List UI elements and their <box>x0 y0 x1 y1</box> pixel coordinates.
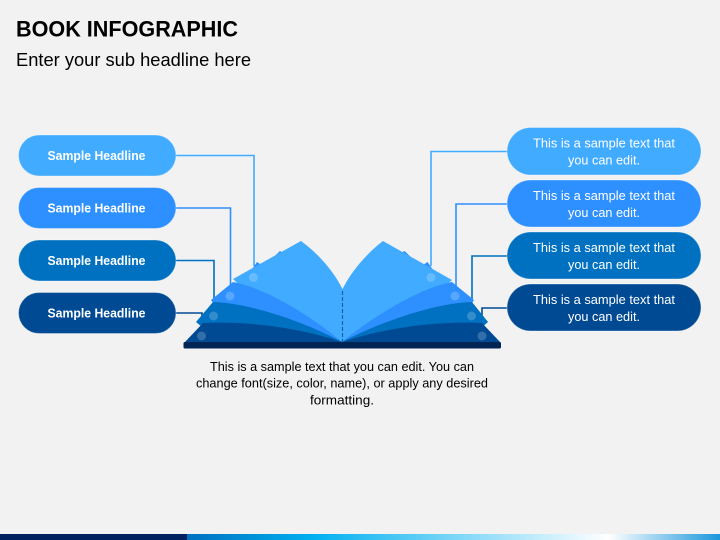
connectors: left <box>176 156 254 326</box>
left pill 1: Sample Headline <box>48 149 146 163</box>
left pill 4 <box>18 292 176 334</box>
connectors: right <box>431 152 507 326</box>
left pill 4: Sample Headline <box>48 306 146 320</box>
right pill 1 <box>507 128 701 175</box>
left pill 2 <box>18 188 176 228</box>
caption text: formatting. <box>310 392 374 407</box>
right pill 3 <box>507 232 701 279</box>
small page tips behind <box>250 251 285 272</box>
spine dashed line <box>342 291 344 342</box>
right pill 2 <box>507 180 701 227</box>
right pill 1: This is a sample text that <box>533 136 675 150</box>
right pages <box>342 241 452 342</box>
book base <box>184 342 501 348</box>
right pill 1: you can edit. <box>568 152 640 168</box>
caption text: This is a sample text that you can edit. You can <box>210 359 474 374</box>
open book illustration <box>184 241 501 348</box>
right pill 2: you can edit. <box>568 205 640 220</box>
right pill 3: This is a sample text that <box>533 240 675 255</box>
caption text: change font(size, color, name), or apply any desired <box>196 376 488 391</box>
sub headline: Enter your sub headline here <box>16 49 251 70</box>
left pill 1 <box>18 135 176 176</box>
right pill 4: This is a sample text that <box>533 292 675 307</box>
page marker dots <box>197 273 486 340</box>
title: BOOK INFOGRAPHIC <box>16 16 238 42</box>
caption text <box>196 359 488 407</box>
left pill 3: Sample Headline <box>48 254 146 268</box>
right pill 4 <box>507 284 701 331</box>
footer bar <box>0 534 720 540</box>
left pages <box>233 241 343 342</box>
right pill 2: This is a sample text that <box>533 188 675 203</box>
right pill 4: you can edit. <box>568 309 640 324</box>
left pill 3 <box>18 240 176 281</box>
right pill 3: you can edit. <box>568 257 640 272</box>
left pill 2: Sample Headline <box>48 202 146 216</box>
